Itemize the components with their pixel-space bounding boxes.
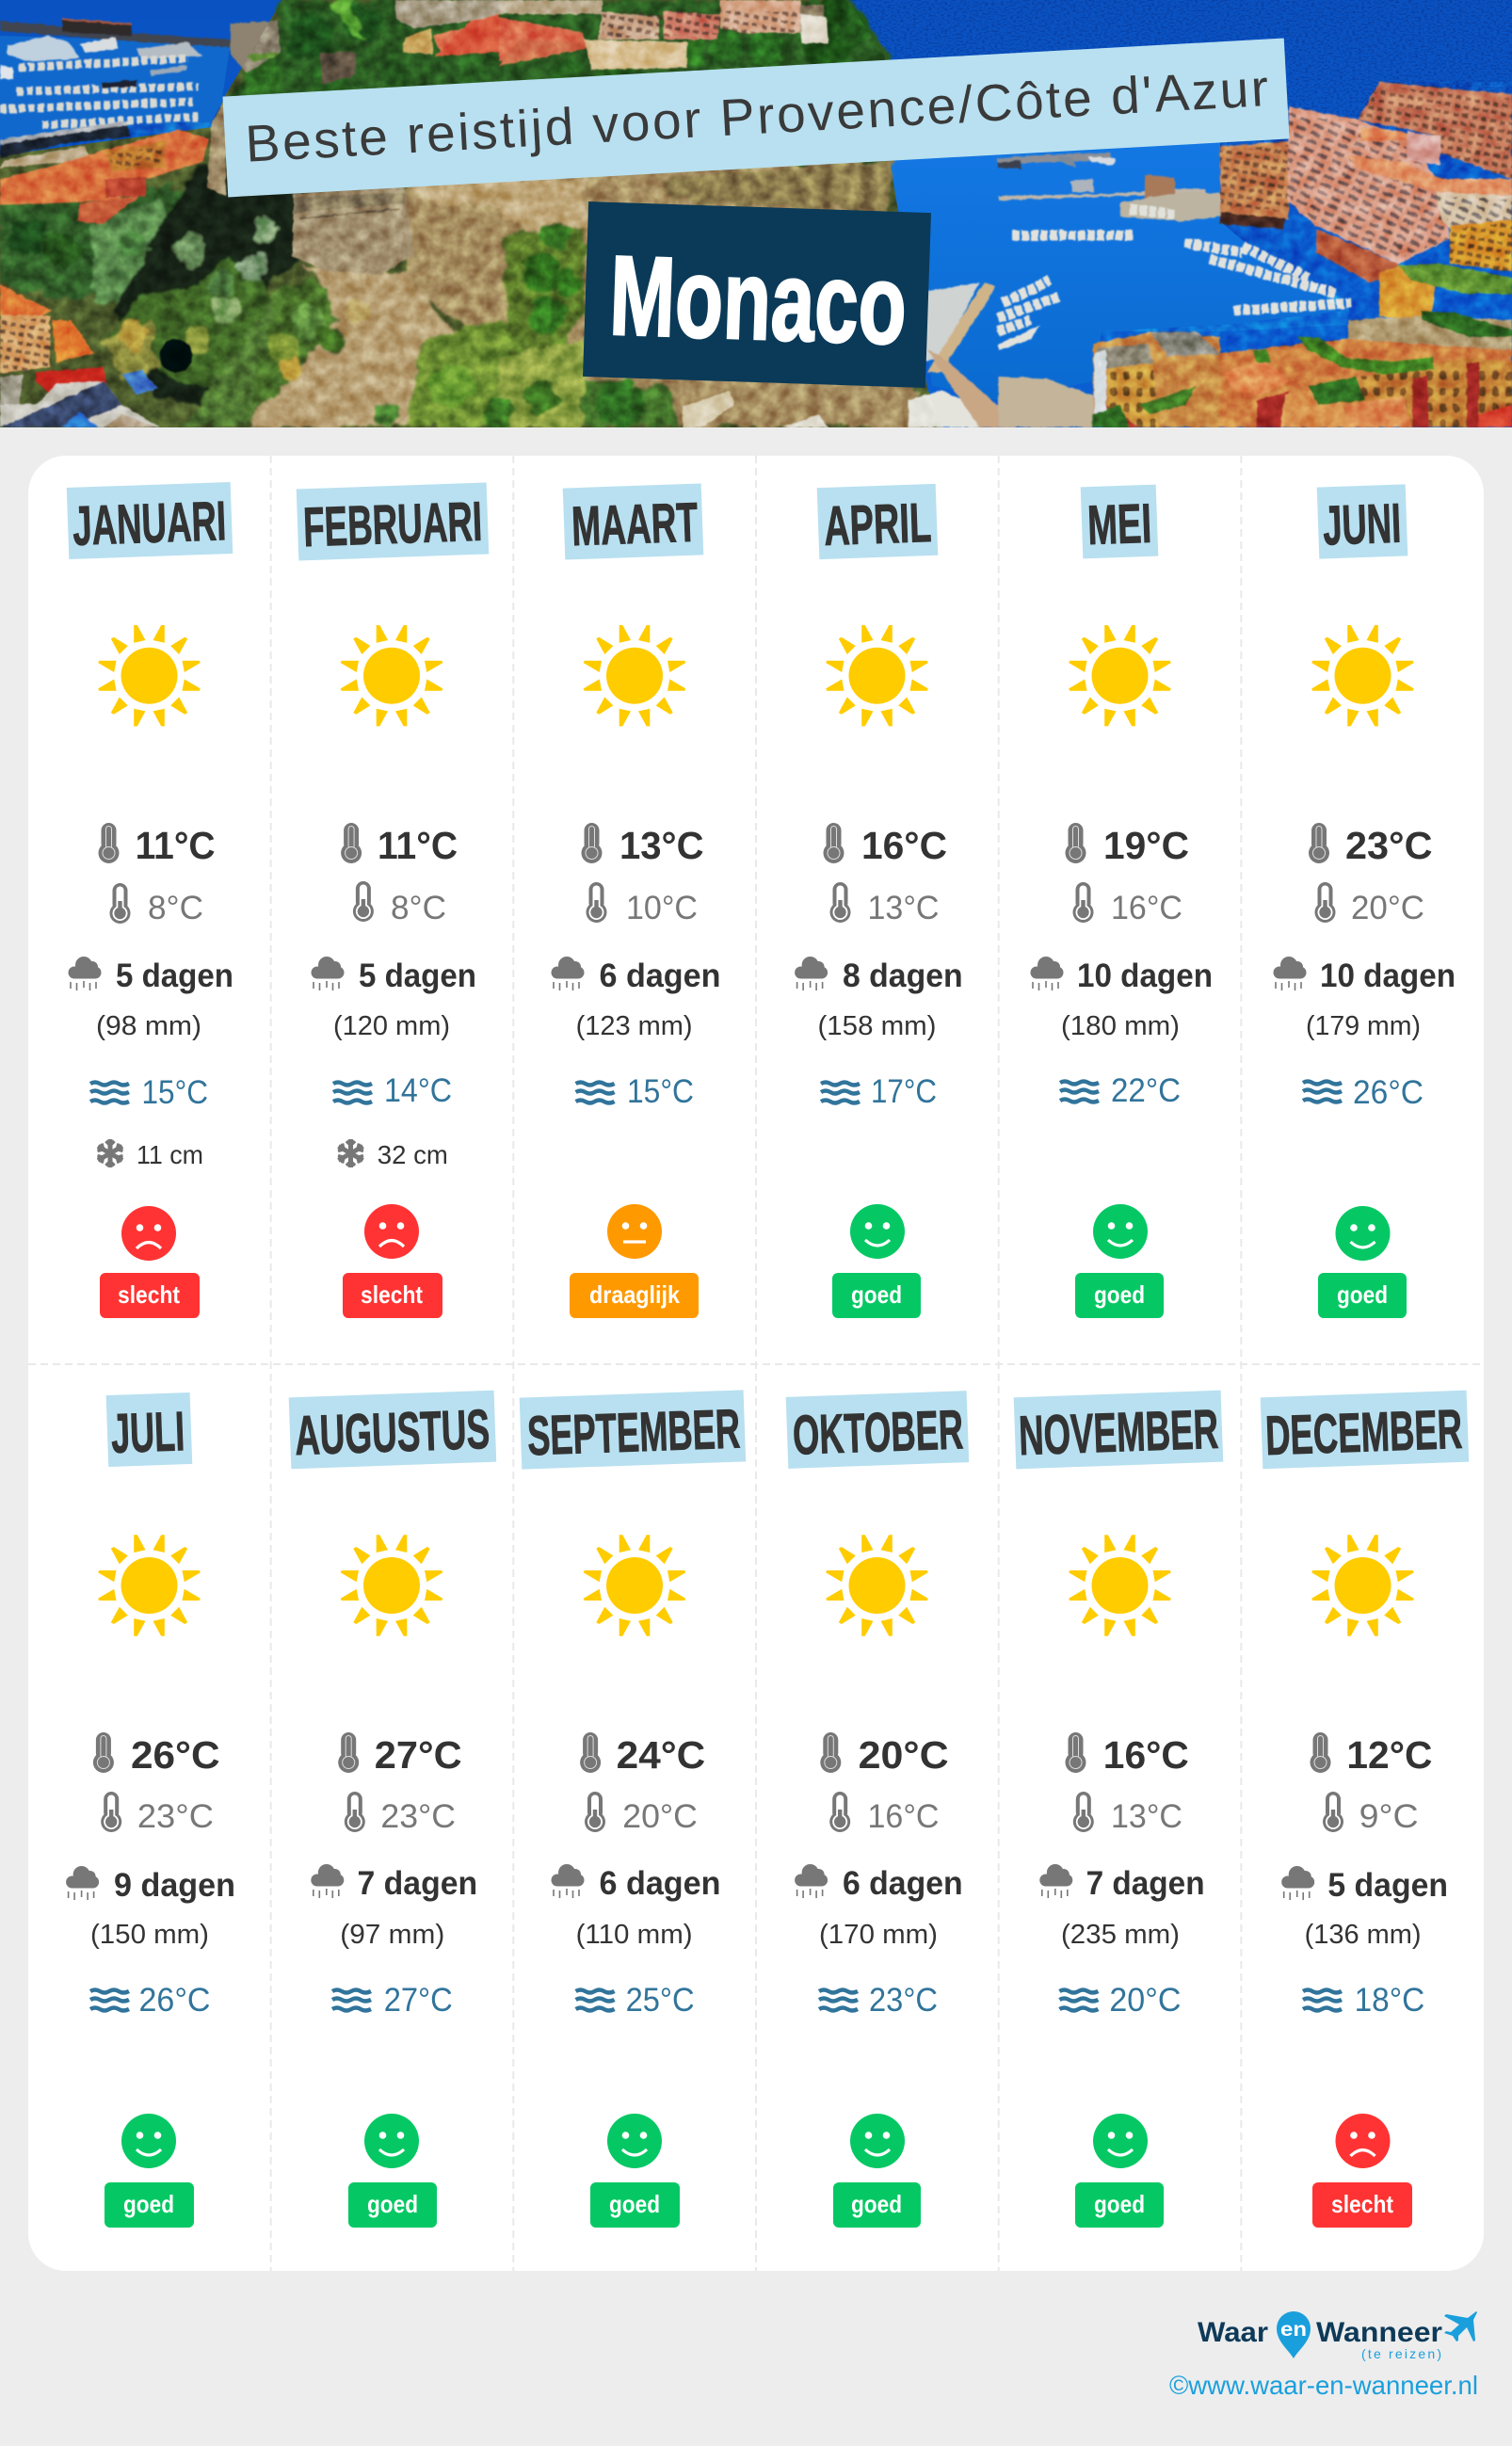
rating badge bbox=[570, 1273, 699, 1318]
panel: calendar card bbox=[28, 456, 1484, 2271]
rating badge: slecht bbox=[118, 1280, 180, 1309]
rain days: 6 dagen bbox=[599, 1865, 721, 1902]
sea temperature bbox=[576, 1073, 694, 1110]
sea temperature: 22°C bbox=[1111, 1072, 1181, 1109]
sea temperature bbox=[1303, 1074, 1424, 1111]
max temperature: 20°C bbox=[859, 1733, 949, 1777]
rating badge: draaglijk bbox=[589, 1280, 680, 1309]
rating badge: slecht bbox=[361, 1280, 423, 1309]
rain days: 7 dagen bbox=[1086, 1865, 1205, 1902]
rating badge bbox=[105, 2182, 194, 2228]
sea temperature: 20°C bbox=[1109, 1982, 1181, 2019]
sea temperature: 26°C bbox=[1353, 1074, 1424, 1111]
month heading: JULI bbox=[110, 1400, 185, 1465]
max temperature bbox=[823, 823, 947, 867]
icon: sun bbox=[1069, 1535, 1171, 1636]
rain days: 8 dagen bbox=[843, 957, 963, 994]
month heading bbox=[289, 1391, 496, 1469]
min temperature bbox=[353, 881, 446, 926]
min temperature bbox=[1073, 882, 1182, 926]
min temperature bbox=[1073, 1792, 1182, 1835]
rain days bbox=[1273, 957, 1456, 994]
panel: mei bbox=[1030, 485, 1213, 1318]
snow: 11 cm bbox=[137, 1140, 203, 1169]
panel: juni bbox=[1273, 484, 1456, 1318]
sea temperature: 25°C bbox=[626, 1982, 695, 2019]
rating badge bbox=[1312, 2182, 1412, 2228]
sea temperature bbox=[332, 1982, 453, 2019]
sea temperature bbox=[1060, 1072, 1181, 1109]
rainfall: (170 mm) bbox=[819, 1920, 938, 1950]
icon: sun bbox=[826, 625, 928, 726]
max temperature bbox=[1066, 823, 1189, 867]
icon: sun bbox=[341, 1535, 442, 1636]
max temperature: 26°C bbox=[131, 1733, 220, 1777]
rating face bbox=[121, 2114, 176, 2168]
logo: Waar en Wanneer: (te reizen) bbox=[1361, 2346, 1441, 2361]
max temperature bbox=[580, 1732, 705, 1777]
rainfall: (150 mm) bbox=[90, 1920, 209, 1950]
month heading: JUNI bbox=[1322, 492, 1402, 556]
min temperature: 20°C bbox=[622, 1798, 698, 1835]
max temperature bbox=[98, 823, 216, 867]
sea temperature: 18°C bbox=[1355, 1982, 1424, 2019]
icon: airplane bbox=[1444, 2311, 1477, 2341]
min temperature bbox=[585, 1792, 698, 1835]
snow bbox=[98, 1139, 203, 1169]
max temperature: 24°C bbox=[617, 1733, 705, 1777]
rating face bbox=[607, 1204, 662, 1259]
min temperature bbox=[101, 1792, 214, 1835]
max temperature bbox=[338, 1732, 462, 1777]
rain days: 7 dagen bbox=[358, 1865, 477, 1902]
rainfall: (120 mm) bbox=[333, 1011, 450, 1041]
source url: ©www.waar-en-wanneer.nl bbox=[1169, 2371, 1478, 2400]
rating face bbox=[364, 1204, 419, 1259]
rating face bbox=[1093, 1204, 1148, 1259]
rating badge: goed bbox=[851, 1280, 902, 1309]
rainfall: (98 mm) bbox=[96, 1011, 201, 1041]
sea temperature: 27°C bbox=[384, 1982, 453, 2019]
max temperature: 12°C bbox=[1346, 1733, 1432, 1777]
min temperature: 16°C bbox=[868, 1798, 940, 1835]
month heading bbox=[520, 1390, 746, 1470]
min temperature: 10°C bbox=[626, 890, 698, 926]
rain days: 6 dagen bbox=[599, 957, 721, 994]
month heading bbox=[106, 1392, 192, 1467]
rating badge: goed bbox=[1337, 1280, 1388, 1309]
rating badge bbox=[1075, 1273, 1164, 1318]
icon: sun bbox=[826, 1535, 928, 1636]
rainfall: (97 mm) bbox=[340, 1920, 444, 1950]
rating face bbox=[1335, 2114, 1390, 2168]
min temperature bbox=[830, 882, 940, 926]
rain days bbox=[552, 1864, 721, 1902]
month heading: SEPTEMBER bbox=[526, 1398, 741, 1467]
month heading bbox=[297, 482, 489, 561]
month heading bbox=[1317, 484, 1407, 559]
logo: Waar en Wanneer: Waar bbox=[1198, 2317, 1268, 2348]
rating face bbox=[1335, 1206, 1390, 1261]
rain days bbox=[311, 1864, 477, 1902]
sea temperature: 15°C bbox=[627, 1073, 694, 1110]
snow bbox=[338, 1139, 448, 1169]
sea temperature bbox=[333, 1072, 452, 1109]
rating face bbox=[850, 2114, 905, 2168]
rain days bbox=[311, 957, 476, 994]
rain days: 6 dagen bbox=[843, 1865, 963, 1902]
rating face bbox=[607, 2114, 662, 2168]
month heading: AUGUSTUS bbox=[294, 1398, 491, 1467]
month heading bbox=[563, 483, 703, 560]
sea temperature bbox=[576, 1982, 695, 2019]
min temperature bbox=[1314, 882, 1424, 926]
rainfall: (110 mm) bbox=[576, 1920, 693, 1950]
max temperature bbox=[1309, 823, 1433, 867]
icon: sun bbox=[98, 625, 201, 726]
rating badge: slecht bbox=[1331, 2190, 1393, 2218]
month heading bbox=[786, 1391, 969, 1469]
rating badge bbox=[1075, 2182, 1164, 2228]
month heading: NOVEMBER bbox=[1018, 1398, 1219, 1467]
max temperature bbox=[1311, 1732, 1432, 1777]
min temperature: 20°C bbox=[1351, 890, 1424, 926]
rain days bbox=[1281, 1866, 1448, 1904]
rating face bbox=[1093, 2114, 1148, 2168]
min temperature bbox=[1323, 1792, 1419, 1835]
max temperature: 27°C bbox=[375, 1733, 462, 1777]
rain days bbox=[1039, 1864, 1205, 1902]
rain days: 5 dagen bbox=[359, 957, 476, 994]
rating face bbox=[364, 2114, 419, 2168]
rain days: 10 dagen bbox=[1320, 957, 1456, 994]
rainfall: (235 mm) bbox=[1061, 1920, 1180, 1950]
rating badge: goed bbox=[367, 2190, 418, 2218]
panel: november bbox=[1014, 1391, 1223, 2228]
rain days: 10 dagen bbox=[1077, 957, 1213, 994]
min temperature bbox=[109, 883, 203, 926]
rain days: 5 dagen bbox=[1327, 1867, 1448, 1904]
rating badge bbox=[348, 2182, 437, 2228]
rating badge: goed bbox=[1094, 1280, 1145, 1309]
rating badge bbox=[833, 2182, 921, 2228]
max temperature: 19°C bbox=[1103, 824, 1189, 867]
rating face bbox=[850, 1204, 905, 1259]
max temperature: 23°C bbox=[1345, 824, 1433, 867]
panel: juli bbox=[66, 1392, 235, 2228]
min temperature: 8°C bbox=[148, 890, 203, 926]
min temperature bbox=[345, 1792, 456, 1835]
max temperature bbox=[1066, 1732, 1189, 1777]
panel: december bbox=[1261, 1391, 1469, 2228]
min temperature: 9°C bbox=[1359, 1798, 1419, 1835]
rating badge: goed bbox=[1094, 2190, 1145, 2218]
min temperature: 8°C bbox=[391, 890, 446, 926]
panel: april bbox=[795, 484, 963, 1318]
rating badge bbox=[590, 2182, 680, 2228]
destination label: Monaco: Monaco bbox=[608, 233, 909, 368]
max temperature: 13°C bbox=[619, 824, 704, 867]
rain days: 5 dagen bbox=[116, 957, 233, 994]
rainfall: (179 mm) bbox=[1306, 1011, 1421, 1041]
min temperature bbox=[586, 882, 698, 926]
rain days bbox=[68, 957, 233, 994]
rain days bbox=[552, 957, 721, 994]
sea temperature bbox=[90, 1074, 208, 1111]
min temperature: 23°C bbox=[380, 1798, 456, 1835]
sea temperature bbox=[90, 1982, 211, 2019]
destination label: Monaco bbox=[583, 201, 931, 388]
rainfall: (158 mm) bbox=[817, 1011, 936, 1041]
month heading: MEI bbox=[1086, 492, 1152, 556]
max temperature: 16°C bbox=[1103, 1733, 1189, 1777]
panel: september bbox=[520, 1390, 746, 2228]
rain days bbox=[795, 1864, 963, 1902]
icon: sun bbox=[1069, 625, 1171, 726]
max temperature: 11°C bbox=[136, 824, 216, 867]
sea temperature: 15°C bbox=[141, 1074, 208, 1111]
month heading bbox=[67, 482, 233, 559]
month heading: JANUARI bbox=[72, 490, 227, 557]
rating badge bbox=[100, 1273, 200, 1318]
rating face bbox=[121, 1206, 176, 1261]
rain days bbox=[795, 957, 963, 994]
panel: februari bbox=[297, 482, 489, 1318]
panel: augustus bbox=[289, 1391, 496, 2228]
sea temperature: 23°C bbox=[869, 1982, 938, 2019]
month heading: FEBRUARI bbox=[302, 491, 483, 558]
rating badge bbox=[832, 1273, 921, 1318]
max temperature bbox=[820, 1732, 949, 1777]
title band bbox=[222, 39, 1290, 197]
panel: oktober bbox=[786, 1391, 969, 2228]
sea temperature: 14°C bbox=[384, 1072, 452, 1109]
logo: Waar en Wanneer bbox=[1198, 2311, 1477, 2361]
snow: 32 cm bbox=[378, 1140, 448, 1169]
rainfall: (136 mm) bbox=[1305, 1920, 1422, 1950]
max temperature: 11°C bbox=[378, 824, 458, 867]
min temperature: 13°C bbox=[868, 890, 940, 926]
sea temperature: 17°C bbox=[871, 1073, 937, 1110]
max temperature: 16°C bbox=[861, 824, 947, 867]
sea temperature bbox=[821, 1073, 937, 1110]
rainfall: (180 mm) bbox=[1061, 1011, 1180, 1041]
icon: sun bbox=[584, 625, 685, 726]
panel: maart bbox=[552, 483, 721, 1318]
rainfall: (123 mm) bbox=[576, 1011, 693, 1041]
icon: sun bbox=[1311, 625, 1414, 726]
title band: Beste reistijd voor Provence/Côte d'Azur bbox=[244, 58, 1270, 173]
rating badge: goed bbox=[609, 2190, 660, 2218]
rating badge: goed bbox=[123, 2190, 174, 2218]
icon: sun bbox=[98, 1535, 201, 1636]
logo: Waar en Wanneer: en bbox=[1280, 2319, 1307, 2341]
sea temperature bbox=[1303, 1982, 1424, 2019]
logo: Waar en Wanneer: Wanneer bbox=[1316, 2317, 1442, 2348]
rain days: 9 dagen bbox=[114, 1867, 235, 1904]
month heading bbox=[1014, 1391, 1223, 1469]
month heading: MAART bbox=[571, 491, 699, 557]
rating badge: goed bbox=[851, 2190, 902, 2218]
month heading: OKTOBER bbox=[792, 1398, 964, 1467]
icon: sun bbox=[584, 1535, 685, 1636]
min temperature bbox=[829, 1792, 940, 1835]
month heading bbox=[1081, 485, 1158, 558]
max temperature bbox=[582, 823, 704, 867]
icon: sun bbox=[341, 625, 442, 726]
sea temperature bbox=[1059, 1982, 1181, 2019]
min temperature: 23°C bbox=[137, 1798, 214, 1835]
sea temperature: 26°C bbox=[139, 1982, 211, 2019]
min temperature: 13°C bbox=[1111, 1798, 1182, 1835]
month heading: APRIL bbox=[823, 491, 932, 557]
panel: januari bbox=[67, 482, 233, 1318]
max temperature bbox=[341, 823, 458, 867]
hero photo: Monaco harbour bbox=[0, 0, 1512, 429]
sea temperature bbox=[819, 1982, 938, 2019]
min temperature: 16°C bbox=[1111, 890, 1182, 926]
icon: map pin bbox=[1277, 2311, 1311, 2358]
rain days bbox=[66, 1866, 235, 1904]
rating badge bbox=[343, 1273, 442, 1318]
max temperature bbox=[93, 1732, 220, 1777]
rating badge bbox=[1318, 1273, 1407, 1318]
month heading bbox=[817, 484, 938, 559]
icon: sun bbox=[1311, 1535, 1414, 1636]
rain days bbox=[1030, 957, 1213, 994]
